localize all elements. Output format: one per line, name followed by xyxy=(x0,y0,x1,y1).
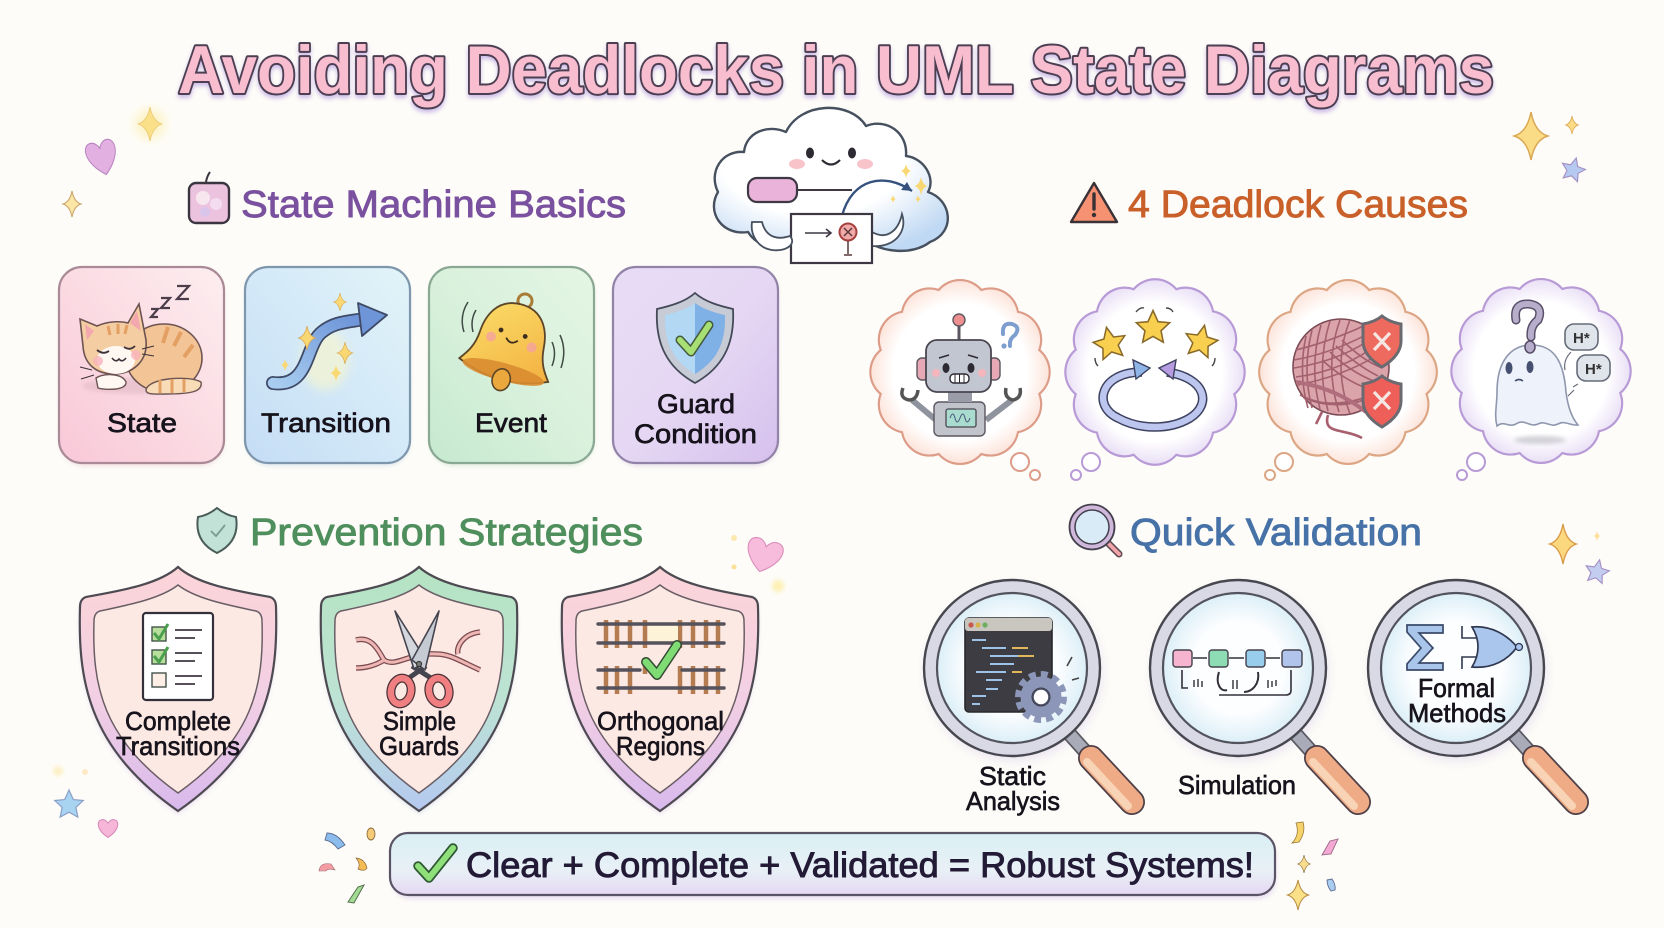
label: static analysis: Analysis xyxy=(966,786,1060,816)
heading text: Prevention Strategies xyxy=(250,512,643,554)
heading text: 4 Deadlock Causes xyxy=(1128,184,1468,226)
icon: yarn ball with red shields xyxy=(1293,316,1401,438)
mascot: smiling cloud holding a state diagram xyxy=(714,108,948,263)
decorative sparkles top right xyxy=(1514,112,1588,183)
label: simple guards: Simple xyxy=(383,706,456,736)
label: static analysis: Static xyxy=(979,761,1046,791)
heading: prevention strategies xyxy=(197,508,643,554)
icon: parallel tracks with check xyxy=(598,620,724,694)
magnifier: simulation xyxy=(1150,580,1358,806)
curved arrow with sparkles xyxy=(842,164,927,216)
icon: guard shield xyxy=(657,293,733,383)
icon: checklist xyxy=(143,613,213,700)
icon: transition arrow xyxy=(273,293,387,390)
card: event xyxy=(429,267,594,466)
summary banner xyxy=(390,833,1276,899)
face xyxy=(789,148,873,169)
state pill and connector xyxy=(748,178,852,202)
label: formal methods: Formal xyxy=(1418,673,1495,703)
magnifier: static analysis xyxy=(924,580,1132,816)
zzz xyxy=(151,286,189,317)
label: orthogonal regions: Orthogonal xyxy=(597,706,724,736)
icon: bell xyxy=(454,292,566,402)
cloud arm right xyxy=(872,214,903,246)
label: formal methods: Methods xyxy=(1408,698,1506,728)
label: complete transitions: Transitions xyxy=(116,731,240,761)
motion lines xyxy=(462,302,564,368)
decorative heart and glints near prevention shields xyxy=(731,535,785,592)
icon: state block xyxy=(189,172,229,223)
heading text: State Machine Basics xyxy=(241,184,626,226)
label: orthogonal regions: Regions xyxy=(616,731,705,761)
diagram sheet with stop sign xyxy=(791,214,872,263)
card: transition xyxy=(245,267,410,466)
heading text: Quick Validation xyxy=(1130,512,1422,554)
confetti left xyxy=(319,828,375,903)
icon: warning triangle xyxy=(1071,183,1117,222)
label: guard condition: Guard xyxy=(657,389,735,419)
panel: prevention strategies xyxy=(80,508,758,814)
label: state: State xyxy=(107,408,177,438)
icon: scissors cutting string xyxy=(356,611,480,706)
cause bubble: ghost history states xyxy=(1451,279,1631,480)
label: transition: Transition xyxy=(261,408,391,438)
cause bubble: circular wait xyxy=(1065,279,1245,480)
cloud arm left xyxy=(752,222,792,250)
icon: green check xyxy=(418,848,453,878)
shield: orthogonal regions xyxy=(562,567,758,814)
card: state xyxy=(59,267,224,466)
shield: complete transitions xyxy=(80,567,276,814)
icon: small shield xyxy=(197,508,237,553)
icon: confused robot xyxy=(902,314,1020,436)
panel: 4 deadlock causes xyxy=(870,183,1631,480)
icon: ghost with question mark xyxy=(1496,304,1610,444)
heading: deadlock causes xyxy=(1071,183,1468,226)
icon: small magnifier xyxy=(1070,504,1119,554)
magnifier: formal methods xyxy=(1368,580,1576,806)
icon: ghost with question mark: H* xyxy=(1573,330,1590,347)
icon: ghost with question mark: H* xyxy=(1585,361,1602,378)
icon: sleeping cat xyxy=(80,286,202,394)
label: simple guards: Guards xyxy=(379,731,459,761)
decorative sparkles top left xyxy=(63,107,165,217)
icon: stars and loop arrows xyxy=(1091,308,1220,427)
icon: simulated state flow xyxy=(1173,650,1302,695)
decorative star and heart bottom left xyxy=(53,766,118,837)
heading: quick validation xyxy=(1070,504,1422,554)
panel: quick validation xyxy=(924,504,1576,816)
confetti right xyxy=(1288,822,1338,910)
panel: state machine basics xyxy=(59,172,778,466)
icon: code window with gear xyxy=(965,618,1079,720)
card: guard condition xyxy=(613,267,778,466)
heading: state machine basics xyxy=(189,172,626,226)
decorative sparkle and star right xyxy=(1550,524,1611,584)
cause bubble: robot xyxy=(870,280,1050,480)
cause bubble: tangled guards xyxy=(1259,280,1437,480)
banner text: Clear + Complete + Validated = Robust Systems! xyxy=(466,846,1254,885)
icon: sigma and logic gate xyxy=(1407,625,1522,670)
label: guard condition: Condition xyxy=(634,419,757,449)
label: simulation: Simulation xyxy=(1178,770,1296,800)
shield: simple guards xyxy=(321,567,517,814)
label: event: Event xyxy=(475,408,548,438)
title: Avoiding Deadlocks in UML State Diagrams xyxy=(178,32,1494,108)
label: complete transitions: Complete xyxy=(125,706,231,736)
